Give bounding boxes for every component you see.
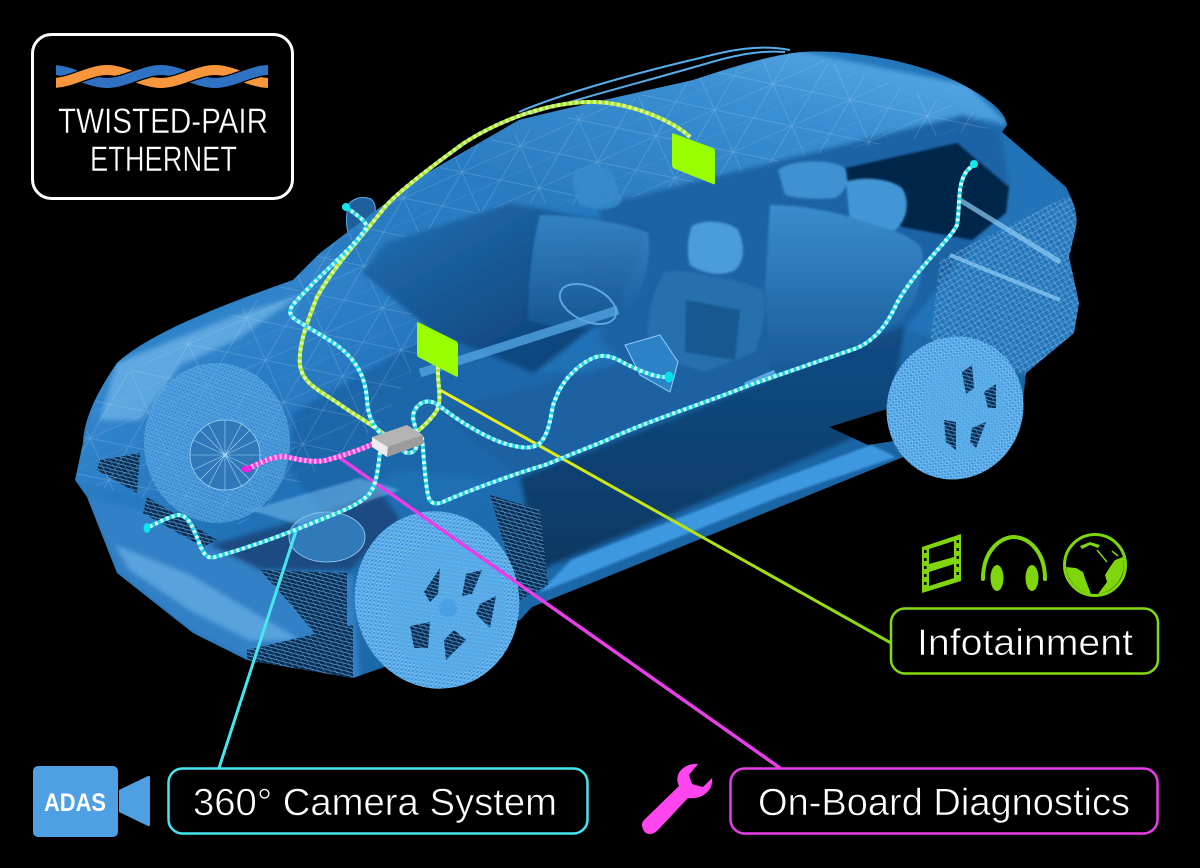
icon: ADAS camera (33, 766, 150, 837)
centre front (210, 490, 400, 570)
callout: on-board diagnostics (730, 768, 1158, 834)
passenger seat (528, 166, 649, 329)
rear side window (837, 143, 1009, 240)
lower grille (143, 497, 217, 547)
bumper skirt (247, 625, 353, 680)
wire: infotainment display (418, 366, 439, 431)
callout: infotainment: Infotainment (917, 622, 1134, 663)
headlight (289, 512, 365, 562)
wire: rear camera (422, 165, 974, 503)
legend title: ETHERNET (90, 140, 237, 179)
icon: ADAS camera: ADAS (44, 789, 106, 817)
leader line: camera (219, 528, 297, 768)
icon: film strip (922, 534, 961, 593)
door handle (745, 372, 775, 385)
rear wheel (866, 317, 1044, 499)
legend title (58, 102, 268, 179)
leader line: infotainment (440, 390, 891, 643)
callout: infotainment (891, 608, 1158, 674)
legend: twisted-pair ethernet (32, 34, 292, 198)
rear door bars (950, 200, 1060, 300)
gear console (625, 335, 678, 392)
lower bumper (87, 497, 360, 680)
door belt (518, 363, 746, 482)
wire end nodes (144, 160, 978, 533)
leader line: diagnostics (340, 458, 780, 768)
fender light wedge (250, 478, 400, 525)
rear seat (765, 161, 923, 375)
wire: front camera (147, 452, 380, 558)
wire: console camera (400, 356, 668, 453)
wire: infotainment arc (300, 102, 690, 434)
mirror (347, 198, 375, 240)
display panel: front (417, 322, 458, 377)
front wheel arch (490, 495, 548, 600)
lower doors (520, 325, 905, 570)
wireframe car (75, 48, 1080, 704)
body panels (75, 50, 1080, 680)
driver seat (648, 222, 765, 372)
hood highlight (100, 295, 300, 420)
steering wheel (554, 276, 622, 332)
sill highlight (539, 445, 896, 593)
icon: wrench (642, 764, 712, 834)
front wheel (338, 496, 536, 704)
seats (528, 161, 923, 375)
roof rails (519, 48, 790, 114)
icon: globe (1064, 534, 1126, 596)
ethernet switch box (372, 425, 423, 457)
roof panel (469, 50, 1010, 205)
hood (75, 253, 434, 525)
cabin centre (599, 116, 1006, 360)
cowl band (290, 343, 568, 492)
legend title: TWISTED-PAIR (58, 102, 268, 141)
wire: mirror camera (290, 207, 382, 435)
callout: on-board diagnostics: On-Board Diagnostics (758, 782, 1130, 824)
engine fan (144, 363, 290, 523)
callout: 360 camera: 360° Camera System (193, 782, 557, 824)
icon: headphones (983, 537, 1045, 591)
windshield (318, 147, 510, 273)
lower dark intake (260, 570, 347, 634)
body shell (75, 52, 1079, 678)
front interior (362, 203, 648, 373)
bumper light strip (115, 545, 300, 640)
dash bar (420, 310, 618, 373)
callout: 360 camera (168, 768, 588, 834)
mesh overlay: roof and hood (75, 50, 1010, 525)
wire: diagnostics (247, 443, 375, 469)
twisted pair icon (53, 70, 269, 83)
display panel: rear (672, 133, 715, 184)
rear mesh (930, 190, 1080, 375)
grille (97, 453, 140, 493)
gap under body (829, 409, 894, 445)
rear quarter (905, 132, 1080, 375)
